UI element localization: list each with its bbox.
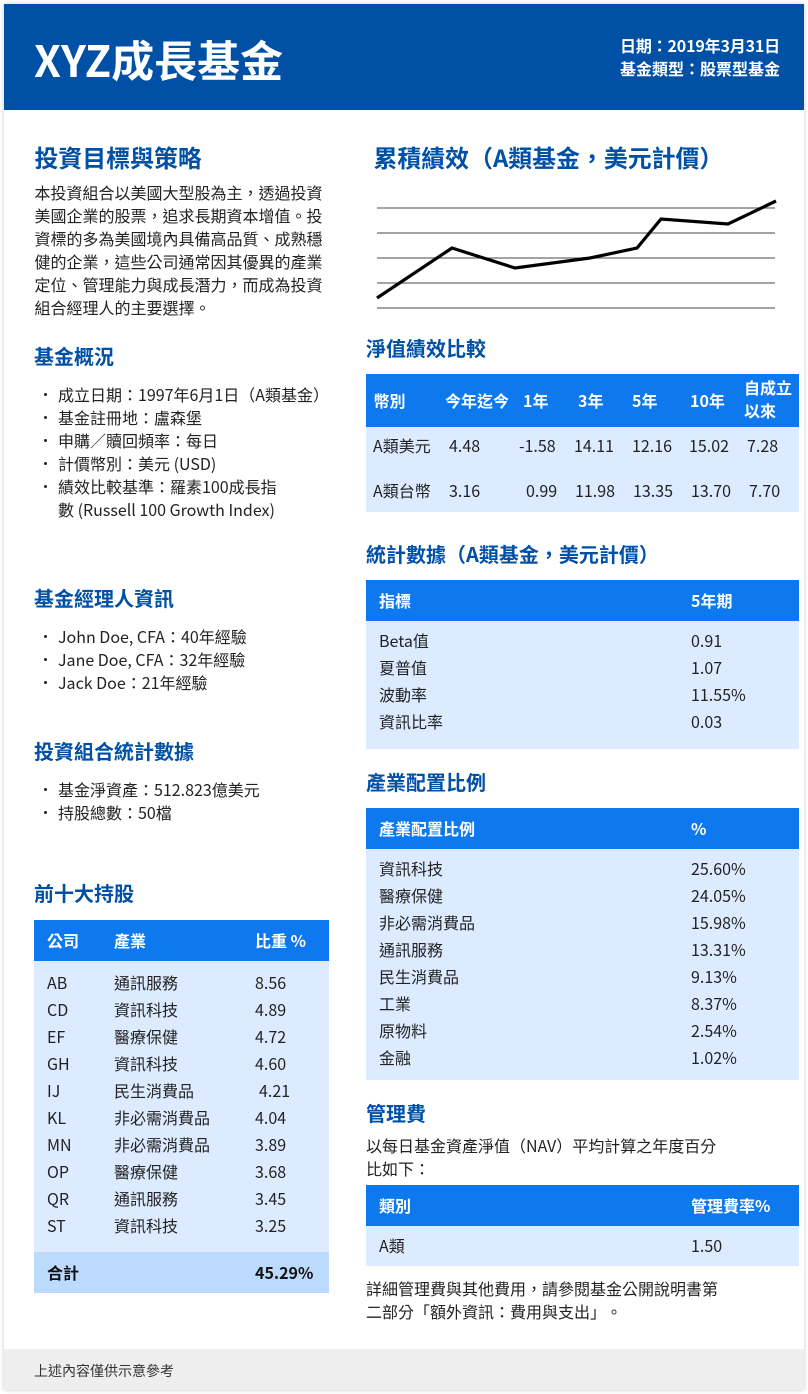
sector table body [366, 849, 799, 1080]
managers list [44, 624, 247, 694]
NAV table header: 5年 [632, 388, 657, 412]
section: investment objective [34, 139, 323, 319]
fee table body: A類 [379, 1233, 405, 1257]
fee table header [366, 1185, 799, 1226]
fee intro text [366, 1133, 716, 1180]
objective text: 本投資組合以美國大型股為主，透過投資 [34, 180, 323, 204]
statistics table body: 0.91 [691, 628, 722, 652]
statistics table body: 0.03 [691, 709, 722, 733]
objective text: 美國企業的股票，追求長期資本增值。投 [34, 203, 323, 227]
holdings table body: 資訊科技 [114, 1213, 178, 1237]
statistics table header: 5年期 [691, 588, 732, 612]
NAV table body [366, 427, 799, 512]
sector table body: 原物料 [379, 1018, 427, 1042]
fee table body: 1.50 [691, 1233, 722, 1257]
sector table header [366, 808, 799, 849]
NAV table body: A類台幣 [373, 478, 431, 502]
NAV table header: 以來 [744, 398, 776, 422]
holdings table body: 3.25 [255, 1213, 286, 1237]
holdings table body: 3.68 [255, 1159, 286, 1183]
NAV table header: 1年 [523, 388, 548, 412]
NAV table header: 自成立 [744, 375, 792, 399]
holdings table body: GH [47, 1051, 70, 1075]
sector table body: 13.31% [691, 937, 746, 961]
section: statistics [366, 539, 799, 749]
sector table body: 9.13% [691, 964, 737, 988]
overview list: 成立日期：1997年6月1日（A類基金） [58, 382, 329, 406]
sector table body: 24.05% [691, 883, 746, 907]
NAV table body: 0.99 [526, 478, 557, 502]
holdings table body: 3.89 [255, 1132, 286, 1156]
statistics table body: 1.07 [691, 655, 722, 679]
NAV table body: 15.02 [689, 433, 729, 457]
section: portfolio statistics [34, 736, 260, 824]
holdings table body: 民生消費品 [114, 1078, 194, 1102]
holdings table body: 醫療保健 [114, 1159, 178, 1183]
holdings table body: 4.60 [255, 1051, 286, 1075]
holdings table body: 3.45 [255, 1186, 286, 1210]
statistics table body: 夏普值 [379, 655, 427, 679]
title: XYZ成長基金 [34, 28, 283, 90]
section: fund overview [34, 341, 329, 521]
statistics table body [366, 621, 799, 749]
NAV table body: -1.58 [519, 433, 556, 457]
disclaimer: 上述內容僅供示意參考 [34, 1361, 174, 1381]
objective text: 定位、管理能力與成長潛力，而成為投資 [34, 272, 323, 296]
holdings table body: CD [47, 997, 68, 1021]
footer [4, 1349, 804, 1390]
date and fund type: 日期：2019年3月31日 [620, 32, 780, 56]
holdings table body: 4.72 [255, 1024, 286, 1048]
holdings table body: 醫療保健 [114, 1024, 178, 1048]
holdings total row [34, 1252, 329, 1293]
heading: overview: 基金概況 [34, 341, 114, 370]
managers list: John Doe, CFA：40年經驗 [58, 624, 247, 648]
managers list: Jack Doe：21年經驗 [58, 670, 207, 694]
heading: sector allocation: 產業配置比例 [366, 767, 486, 796]
holdings table header [34, 920, 329, 961]
section: management fee [366, 1098, 799, 1323]
holdings table header: 比重 % [255, 928, 306, 952]
NAV table header: 今年迄今 [445, 388, 509, 412]
sector table header: 產業配置比例 [379, 816, 475, 840]
heading: cumulative performance: 累積績效（A類基金，美元計價） [374, 139, 723, 174]
holdings table body: MN [47, 1132, 72, 1156]
section: sector allocation [366, 767, 799, 1080]
holdings table header: 公司 [47, 928, 79, 952]
holdings table body: OP [47, 1159, 69, 1183]
holdings table body: KL [47, 1105, 66, 1129]
NAV table header: 3年 [578, 388, 603, 412]
sector table body: 8.37% [691, 991, 737, 1015]
holdings total row: 45.29% [255, 1260, 313, 1284]
sector table body: 1.02% [691, 1045, 737, 1069]
objective text [34, 180, 323, 319]
NAV table body: 13.35 [633, 478, 673, 502]
NAV table body: A類美元 [373, 433, 431, 457]
portfolio list: 基金淨資產：512.823億美元 [58, 777, 260, 801]
statistics table body: Beta值 [379, 628, 429, 652]
statistics table header: 指標 [379, 588, 411, 612]
statistics table body: 資訊比率 [379, 709, 443, 733]
heading: managers: 基金經理人資訊 [34, 583, 174, 612]
overview list: 基金註冊地：盧森堡 [58, 405, 202, 429]
NAV table header [366, 374, 799, 427]
NAV table body: 12.16 [632, 433, 672, 457]
sector table body: 醫療保健 [379, 883, 443, 907]
statistics table header [366, 580, 799, 621]
objective text: 資標的多為美國境內具備高品質、成熟穩 [34, 226, 323, 250]
date and fund type [620, 32, 780, 80]
portfolio list: 持股總數：50檔 [58, 800, 172, 824]
holdings table header: 產業 [114, 928, 146, 952]
holdings table body: 4.89 [255, 997, 286, 1021]
sector table header: % [691, 816, 706, 840]
fee note: 二部分「額外資訊：費用與支出」。 [366, 1299, 622, 1323]
header banner [4, 4, 804, 110]
holdings table body: QR [47, 1186, 69, 1210]
heading: objective: 投資目標與策略 [34, 139, 202, 174]
overview list: 計價幣別：美元 (USD) [58, 451, 216, 475]
holdings table body: 資訊科技 [114, 1051, 178, 1075]
holdings table body: EF [47, 1024, 65, 1048]
holdings table body: IJ [47, 1078, 60, 1102]
fee intro text: 以每日基金資產淨值（NAV）平均計算之年度百分 [366, 1133, 716, 1157]
managers list: Jane Doe, CFA：32年經驗 [58, 647, 245, 671]
sector table body: 工業 [379, 991, 411, 1015]
NAV table header: 10年 [690, 388, 725, 412]
objective text: 健的企業，這些公司通常因其優異的產業 [34, 249, 323, 273]
sector table body: 通訊服務 [379, 937, 443, 961]
fee table header: 類別 [379, 1193, 411, 1217]
NAV table body: 14.11 [574, 433, 614, 457]
holdings table body: ST [47, 1213, 66, 1237]
sector table body: 15.98% [691, 910, 746, 934]
holdings total row: 合計 [47, 1260, 79, 1284]
holdings table body: 8.56 [255, 970, 286, 994]
fee table body [366, 1226, 799, 1266]
overview list: 申購／贖回頻率：每日 [58, 428, 218, 452]
NAV table header: 幣別 [374, 388, 406, 412]
holdings table body: 資訊科技 [114, 997, 178, 1021]
portfolio list [44, 777, 260, 824]
sector table body: 民生消費品 [379, 964, 459, 988]
NAV table body: 3.16 [449, 478, 480, 502]
fee intro text: 比如下： [366, 1156, 430, 1180]
section: NAV performance comparison [366, 333, 799, 512]
NAV table body: 7.28 [747, 433, 778, 457]
fee note [366, 1276, 718, 1323]
date and fund type: 基金類型：股票型基金 [620, 56, 780, 80]
sector table body: 25.60% [691, 856, 746, 880]
holdings table body: 非必需消費品 [114, 1105, 210, 1129]
holdings table body [34, 961, 329, 1252]
NAV table body: 4.48 [449, 433, 480, 457]
sector table body: 2.54% [691, 1018, 737, 1042]
objective text: 組合經理人的主要選擇。 [34, 295, 211, 319]
holdings table body: 通訊服務 [114, 970, 178, 994]
NAV table body: 7.70 [749, 478, 780, 502]
section: fund managers [34, 583, 247, 694]
statistics table body: 11.55% [691, 682, 746, 706]
holdings table body: 非必需消費品 [114, 1132, 210, 1156]
holdings table body: 通訊服務 [114, 1186, 178, 1210]
statistics table body: 波動率 [379, 682, 427, 706]
overview list [44, 382, 329, 521]
heading: holdings: 前十大持股 [34, 878, 134, 907]
fee note: 詳細管理費與其他費用，請參閱基金公開說明書第 [366, 1276, 718, 1300]
heading: NAV comparison: 淨值績效比較 [366, 333, 486, 362]
NAV table body: 11.98 [575, 478, 615, 502]
fee table header: 管理費率% [691, 1193, 770, 1217]
heading: management fee: 管理費 [366, 1098, 426, 1127]
section: top ten holdings [34, 878, 329, 1293]
sector table body: 非必需消費品 [379, 910, 475, 934]
heading: statistics: 統計數據（A類基金，美元計價） [366, 539, 659, 568]
overview list: 數 (Russell 100 Growth Index) [58, 497, 275, 521]
line chart: cumulative performance [376, 200, 777, 309]
holdings table body: 4.21 [259, 1078, 290, 1102]
NAV table body: 13.70 [691, 478, 731, 502]
heading: portfolio statistics: 投資組合統計數據 [34, 736, 194, 765]
sector table body: 資訊科技 [379, 856, 443, 880]
holdings table body: 4.04 [255, 1105, 286, 1129]
overview list: 績效比較基準：羅素100成長指 [58, 474, 277, 498]
sector table body: 金融 [379, 1045, 411, 1069]
holdings table body: AB [47, 970, 67, 994]
